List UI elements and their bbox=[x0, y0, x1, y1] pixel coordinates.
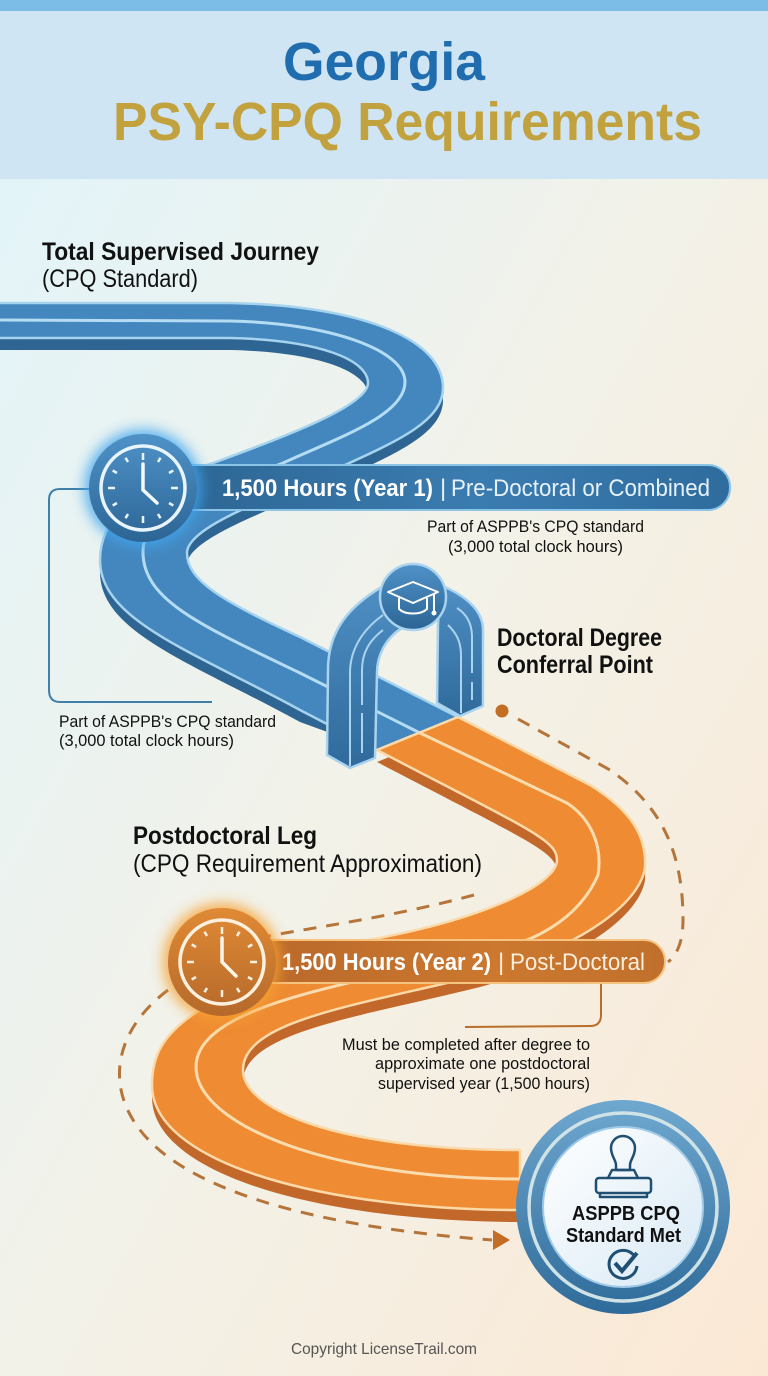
heading: postdoctoral leg: Postdoctoral Leg bbox=[133, 822, 317, 850]
note: year 2 bbox=[342, 1036, 590, 1093]
heading: doctoral degree conferral point: Conferral Point bbox=[497, 651, 654, 679]
icon: year 2 clock bbox=[164, 904, 280, 1020]
note: year 1 right bbox=[427, 518, 644, 556]
note: year 2: Must be completed after degree to bbox=[342, 1036, 590, 1054]
title: PSY-CPQ Requirements bbox=[113, 92, 702, 152]
seal text: Standard Met bbox=[566, 1225, 681, 1247]
note: year 1 left bbox=[59, 713, 276, 750]
icon: stamp bbox=[596, 1136, 651, 1197]
callout bar: year 1: Pre-Doctoral or Combined bbox=[451, 475, 710, 502]
callout bar: year 2: Post-Doctoral bbox=[510, 949, 645, 976]
callout bar: year 2 bbox=[250, 940, 665, 983]
icon: year 1 clock bbox=[85, 430, 201, 546]
note: year 1 right: (3,000 total clock hours) bbox=[448, 538, 623, 556]
seal: ASPPB CPQ standard met bbox=[516, 1100, 730, 1314]
road: blue pre-doctoral segment bbox=[0, 303, 458, 750]
dashed path: year 2 clock to seal bbox=[119, 990, 510, 1250]
heading: doctoral degree conferral point: Doctoral Degree bbox=[497, 624, 662, 652]
note: year 1 left: (3,000 total clock hours) bbox=[59, 732, 234, 750]
dashed path: conferral point to year 2 bar bbox=[496, 704, 683, 962]
callout bar: year 2: 1,500 Hours (Year 2) bbox=[282, 949, 491, 976]
arch right leg bbox=[437, 585, 483, 716]
connector: year 2 note bbox=[465, 984, 601, 1027]
road: orange post-doctoral segment bbox=[152, 717, 645, 1222]
callout bar: year 1: 1,500 Hours (Year 1) bbox=[222, 475, 433, 502]
dashed path: postdoctoral leg above bar bbox=[262, 895, 474, 937]
icon: check mark bbox=[609, 1250, 637, 1278]
seal text: ASPPB CPQ bbox=[572, 1203, 680, 1225]
heading: total supervised journey: (CPQ Standard) bbox=[42, 265, 198, 293]
heading: postdoctoral leg bbox=[133, 822, 482, 878]
note: year 1 right: Part of ASPPB's CPQ standard bbox=[427, 518, 644, 536]
callout bar: year 1 bbox=[170, 465, 730, 510]
callout bar: year 1: | bbox=[440, 475, 446, 502]
header band bbox=[0, 0, 768, 179]
arch left leg bbox=[327, 585, 410, 768]
heading: total supervised journey bbox=[42, 238, 319, 293]
note: year 2: supervised year (1,500 hours) bbox=[378, 1075, 590, 1093]
icon: graduation cap bbox=[380, 564, 446, 630]
heading: total supervised journey: Total Supervised Journey bbox=[42, 238, 319, 266]
note: year 2: approximate one postdoctoral bbox=[375, 1055, 590, 1073]
heading: postdoctoral leg: (CPQ Requirement Approximation) bbox=[133, 850, 482, 878]
arch: doctoral degree conferral point bbox=[327, 564, 483, 768]
title: Georgia bbox=[283, 32, 486, 92]
heading: doctoral degree conferral point bbox=[497, 624, 662, 679]
title bbox=[113, 32, 702, 152]
callout bar: year 2: | bbox=[498, 949, 504, 976]
connector: year 1 note bbox=[49, 489, 212, 702]
note: year 1 left: Part of ASPPB's CPQ standard bbox=[59, 713, 276, 731]
copyright: Copyright LicenseTrail.com bbox=[291, 1341, 477, 1358]
seal text bbox=[566, 1203, 681, 1247]
